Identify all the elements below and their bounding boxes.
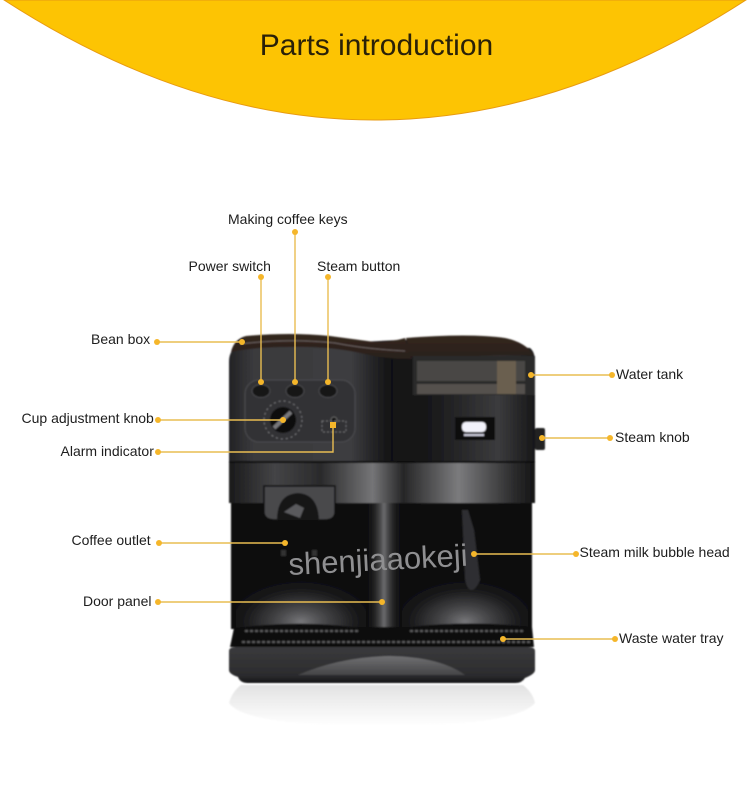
top lid right xyxy=(406,336,534,357)
alarm indicator xyxy=(322,417,346,432)
top lid left xyxy=(231,334,412,359)
label: Cup adjustment knob xyxy=(22,410,286,426)
drip tray xyxy=(229,647,535,683)
label: Steam milk bubble head xyxy=(471,544,730,560)
cavity glow right xyxy=(402,555,528,629)
coffee outlet xyxy=(264,486,335,556)
label: Steam button xyxy=(317,258,400,385)
label: Making coffee keys: Making coffee keys xyxy=(228,211,348,227)
water tank window xyxy=(413,356,535,395)
upper body xyxy=(229,340,535,462)
steam wand xyxy=(462,510,480,590)
label: Door panel: Door panel xyxy=(83,593,152,609)
label: Steam knob: Steam knob xyxy=(615,429,690,445)
label: Alarm indicator xyxy=(60,422,336,459)
label: Bean box: Bean box xyxy=(91,331,150,347)
power button xyxy=(252,384,270,398)
label: Water tank xyxy=(528,366,684,382)
title: Parts introduction xyxy=(260,29,493,62)
label: Making coffee keys xyxy=(228,211,348,385)
steam button xyxy=(319,384,337,398)
watermark: shenjiaaokeji xyxy=(288,538,468,582)
tray highlight xyxy=(298,656,465,675)
adjustment knob xyxy=(264,401,302,439)
display logo xyxy=(455,417,495,440)
coffee machine xyxy=(229,334,545,726)
label: Alarm indicator: Alarm indicator xyxy=(60,443,154,459)
control panel xyxy=(245,380,355,442)
label: Bean box xyxy=(91,331,245,347)
label: Steam milk bubble head: Steam milk bubble head xyxy=(580,544,730,560)
label: Door panel xyxy=(83,593,385,609)
middle band xyxy=(229,462,535,503)
steam knob xyxy=(535,428,545,450)
label: Coffee outlet: Coffee outlet xyxy=(72,532,151,548)
label: Cup adjustment knob: Cup adjustment knob xyxy=(22,410,154,426)
cavity glow left xyxy=(236,555,366,629)
lid ridge xyxy=(240,341,405,351)
drip tray grille xyxy=(230,624,534,647)
label: Power switch xyxy=(188,258,271,385)
label: Waste water tray: Waste water tray xyxy=(619,630,724,646)
central column xyxy=(366,503,402,629)
label: Steam knob xyxy=(539,429,690,445)
label: Water tank: Water tank xyxy=(616,366,684,382)
machine reflection xyxy=(229,685,535,726)
label: Steam button: Steam button xyxy=(317,258,400,274)
label: Waste water tray xyxy=(500,630,724,646)
lower cavity xyxy=(231,503,532,629)
label: Power switch: Power switch xyxy=(188,258,271,274)
banner: yellow arc xyxy=(4,0,746,120)
coffee button xyxy=(286,384,304,398)
label: Coffee outlet xyxy=(72,532,288,548)
